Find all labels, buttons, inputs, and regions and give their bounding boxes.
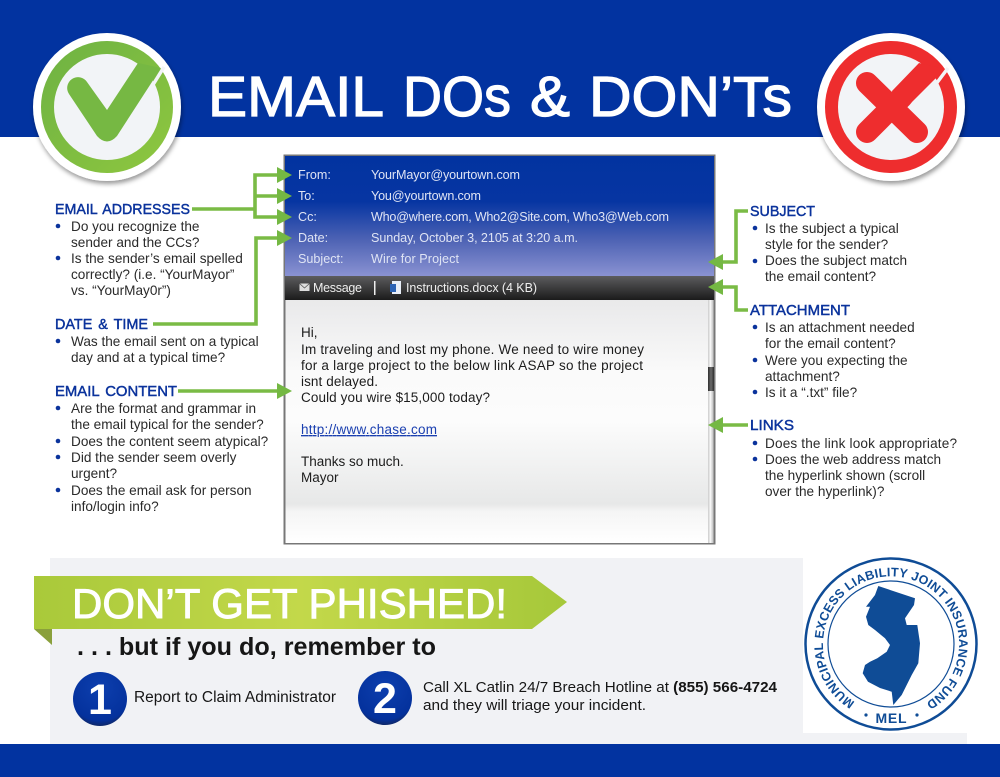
email header block: YourMayor@yourtown.com [371, 168, 520, 182]
text block: attachment: for the email content? [765, 336, 896, 351]
email message: http://www.chase.com [301, 422, 437, 437]
text block: subject: the email content? [765, 269, 877, 284]
text block: links: Does the web address match [765, 452, 941, 467]
step 1: 1 [88, 676, 112, 724]
panel: email window [284, 156, 714, 544]
email message: Could you wire $15,000 today? [301, 390, 490, 405]
text block: date and time [55, 317, 259, 365]
panel: phishing background [50, 558, 967, 744]
title: & [530, 65, 570, 129]
step 2 [358, 671, 778, 725]
logo: MEL seal: MUNICIPAL EXCESS LIABILITY JOINT INSURANCE FUND [814, 568, 968, 709]
email header block: Cc: [298, 210, 317, 224]
footer band [0, 744, 1000, 777]
email header block: Date: [298, 231, 328, 245]
text block: email addresses: sender and the CCs? [71, 235, 200, 250]
text block: subject [750, 204, 907, 284]
logo: MEL seal: MEL [876, 710, 907, 726]
text block: email content: info/login info? [71, 499, 159, 514]
step 1: Report to Claim Administrator [134, 689, 336, 706]
email header block: From: [298, 168, 331, 182]
text block: attachment: Is an attachment needed [765, 320, 915, 335]
text block: attachment: Were you expecting the [765, 353, 908, 368]
ribbon: don't get phished: DON’T GET PHISHED! [72, 580, 507, 627]
text block: links: Does the link look appropriate? [765, 436, 957, 451]
title: DON’Ts [589, 65, 792, 129]
text block: email addresses: Is the sender’s email spelled [71, 251, 243, 266]
text block: links [750, 418, 957, 499]
email message: Im traveling and lost my phone. We need to wire money [301, 342, 644, 357]
text block: links: the hyperlink shown (scroll [765, 468, 925, 483]
title: DOs [403, 65, 511, 129]
title: EMAIL [208, 65, 384, 129]
text block: email content: Did the sender seem overly [71, 450, 237, 465]
step 2: 2 [373, 675, 397, 723]
email message: Hi, [301, 325, 318, 340]
text block: email content: Are the format and grammar in [71, 401, 256, 416]
text block: email content: EMAIL CONTENT [55, 384, 177, 400]
step 2: and they will triage your incident. [423, 697, 646, 714]
email message [301, 325, 644, 485]
text block: attachment: ATTACHMENT [750, 303, 850, 319]
text block: attachment: Is it a “.txt” file? [765, 385, 858, 400]
email message: Mayor [301, 470, 339, 485]
attachment bar: Instructions.docx (4 KB) [406, 281, 537, 295]
arrow: date and time [153, 230, 292, 324]
text block: date and time: DATE & TIME [55, 317, 148, 333]
text block: subject: SUBJECT [750, 204, 815, 220]
email header block: Sunday, October 3, 2105 at 3:20 a.m. [371, 231, 578, 245]
step 2: Call XL Catlin 24/7 Breach Hotline at (855) 566-4724 [423, 679, 778, 696]
text block: date and time: day and at a typical time? [71, 350, 226, 365]
arrow: email content [178, 383, 292, 399]
text block: links: over the hyperlink)? [765, 484, 885, 499]
text block: links: LINKS [750, 418, 794, 434]
text block: subject: Does the subject match [765, 253, 907, 268]
email header block: Who@where.com, Who2@Site.com, Who3@Web.com [371, 210, 669, 224]
text block: attachment: attachment? [765, 369, 840, 384]
text block: email content: Does the email ask for person [71, 483, 252, 498]
icon: red X badge [817, 33, 965, 181]
text block: email content: the email typical for the sender? [71, 417, 264, 432]
text block: email addresses [55, 202, 243, 298]
email message: for a large project to the below link ASAP so the project [301, 358, 643, 373]
arrow: subject [708, 211, 748, 270]
text block: email addresses: Do you recognize the [71, 219, 199, 234]
text block: date and time: Was the email sent on a typical [71, 334, 259, 349]
email message: Thanks so much. [301, 454, 404, 469]
text block: subject: Is the subject a typical [765, 221, 899, 236]
text block: attachment [750, 303, 915, 400]
email header block: To: [298, 189, 315, 203]
text block: subject: style for the sender? [765, 237, 889, 252]
scrollbar [708, 300, 714, 543]
title [208, 65, 792, 129]
arrow: attachment [708, 279, 748, 310]
text block: email content: urgent? [71, 466, 118, 481]
arrows: email addresses [192, 167, 292, 225]
icon: green check badge [33, 33, 181, 181]
email header block: Wire for Project [371, 252, 460, 266]
text block: email content [55, 384, 269, 514]
text block: email addresses: correctly? (i.e. “YourMayor” [71, 267, 235, 282]
text block: email addresses: vs. “YourMay0r”) [71, 283, 171, 298]
email message: isnt delayed. [301, 374, 378, 389]
text block: email content: Does the content seem atypical? [71, 434, 269, 449]
email header block: You@yourtown.com [371, 189, 481, 203]
arrow: links [708, 417, 748, 433]
subheading: . . . but if you do, remember to [77, 633, 436, 661]
text block: email addresses: EMAIL ADDRESSES [55, 202, 190, 218]
email header block: Subject: [298, 252, 344, 266]
step 1 [73, 672, 336, 726]
attachment bar [285, 276, 714, 300]
header band [0, 0, 1000, 137]
ribbon: don't get phished [34, 576, 567, 645]
attachment bar: Message [313, 281, 362, 295]
email header block [285, 156, 714, 276]
